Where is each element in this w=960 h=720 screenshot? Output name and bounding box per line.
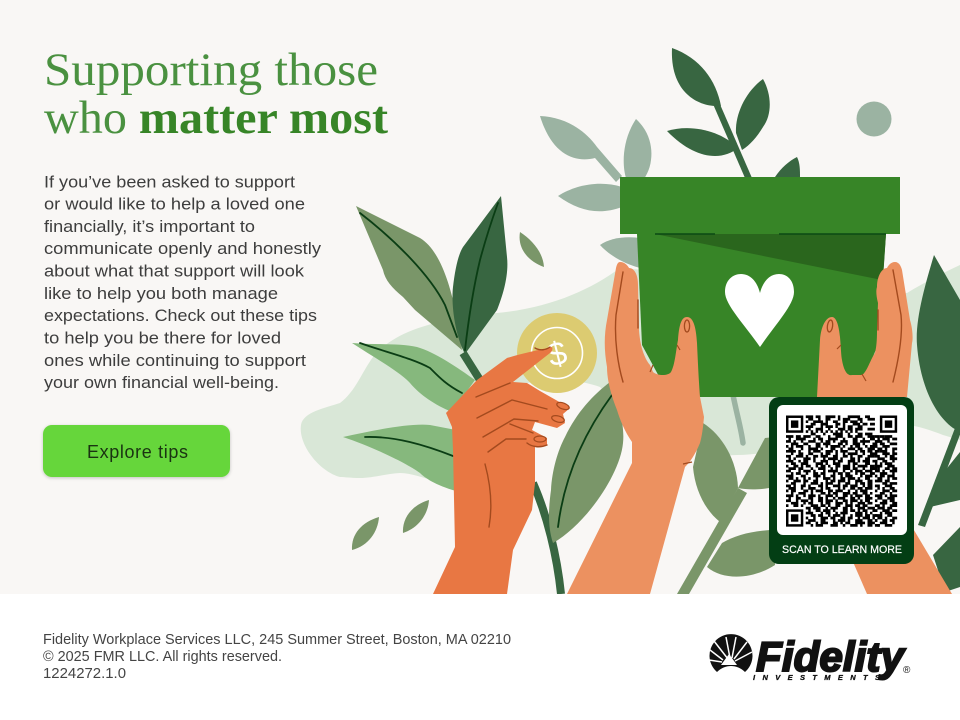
dark leaf	[452, 196, 507, 354]
QR caption: SCAN TO LEARN MORE	[782, 544, 902, 556]
left peach arm and hand	[567, 262, 704, 594]
box body	[637, 234, 886, 397]
heart	[725, 274, 794, 347]
orange hand	[433, 347, 570, 594]
logo tagline: INVESTMENTS	[753, 673, 880, 682]
QR finder patterns	[787, 417, 896, 525]
logo sunburst	[709, 634, 752, 672]
right peach arm and hand	[817, 262, 952, 594]
dark leaf vein	[465, 203, 498, 350]
title	[44, 44, 388, 144]
button: explore tips: Explore tips	[87, 442, 188, 462]
QR right-side data modules	[858, 419, 897, 525]
left olive leaf	[356, 206, 462, 350]
big olive leaf vein	[558, 395, 612, 527]
body text block: expectations. Check out these tips	[44, 306, 317, 325]
coin with dollar sign	[517, 313, 597, 393]
coin with dollar sign: $	[544, 333, 571, 374]
dark plant above box	[667, 48, 800, 178]
footer panel	[0, 594, 960, 720]
body text block: ones while continuing to support	[44, 351, 306, 370]
small floating leaf	[520, 232, 544, 267]
illustration: plants, gift box and hands	[301, 48, 960, 594]
body text block: to help you be there for loved	[44, 328, 281, 348]
box inner shadow	[655, 234, 886, 279]
footer text: Fidelity Workplace Services LLC, 245 Summer Street, Boston, MA 02210	[43, 632, 511, 648]
body text block: like to help you both manage	[44, 284, 278, 303]
box lid	[620, 177, 900, 234]
QR card	[769, 397, 914, 564]
body text block: about what that support will look	[44, 262, 305, 280]
gift box	[620, 177, 900, 397]
lower green leaf vein	[365, 437, 453, 456]
footer text: 1224272.1.0	[43, 666, 126, 682]
logo registered mark: ®	[903, 665, 911, 676]
light stem below box	[733, 395, 743, 443]
title: who matter most	[44, 92, 388, 144]
footer text	[43, 632, 511, 682]
lower olive plant	[677, 423, 775, 594]
Fidelity logo	[709, 633, 911, 682]
body text block: or would like to help a loved one	[44, 194, 305, 214]
body text block	[44, 172, 322, 392]
title: Supporting those	[44, 44, 378, 96]
left olive leaf vein	[360, 213, 457, 337]
circle accent	[856, 102, 892, 136]
light leaves top left of box	[540, 116, 651, 268]
stems under orange hand	[463, 353, 561, 594]
lid shadow lines	[655, 233, 886, 235]
background blob	[301, 265, 960, 480]
body text block: your own financial well-being.	[44, 373, 279, 392]
button: explore tips	[43, 425, 230, 477]
footer text: © 2025 FMR LLC. All rights reserved.	[43, 649, 282, 665]
body text block: communicate openly and honestly	[44, 239, 322, 258]
body text block: financially, it’s important to	[44, 217, 255, 236]
logo wordmark: Fidelity	[756, 633, 907, 680]
upper green leaf vein	[360, 343, 462, 393]
small floating leaves	[352, 500, 429, 550]
right dark leaves	[917, 255, 960, 592]
QR code	[786, 417, 897, 525]
QR finder centres	[791, 420, 892, 522]
lower green leaf	[343, 425, 456, 491]
upper green leaf	[352, 343, 475, 412]
big olive leaf	[549, 382, 623, 543]
body text block: If you’ve been asked to support	[44, 172, 295, 192]
